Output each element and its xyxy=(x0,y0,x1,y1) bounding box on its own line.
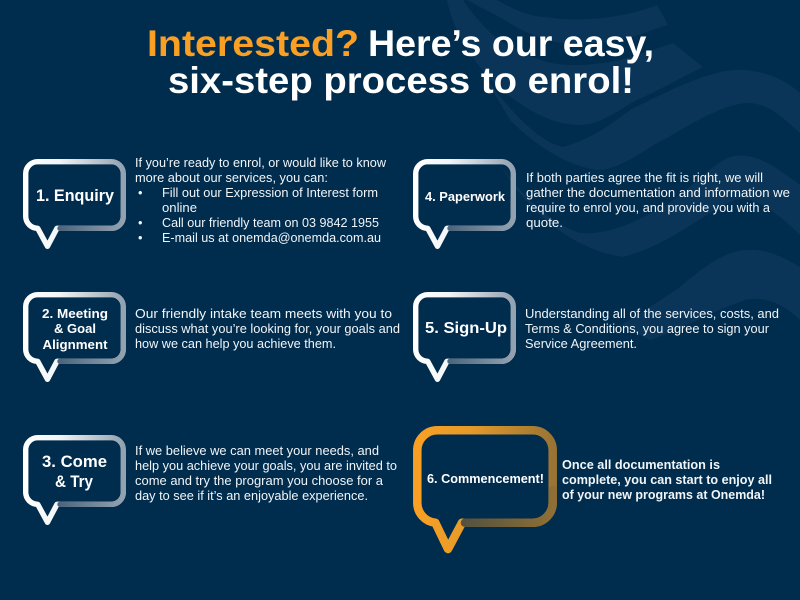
text 2: discuss what you’re looking for, your goals and xyxy=(135,321,400,336)
text 3 xyxy=(135,443,397,503)
title: six-step process to enrol! xyxy=(168,60,634,101)
step 3: come and try xyxy=(26,438,397,522)
label 5: 5. Sign-Up xyxy=(425,320,507,337)
text 1: • xyxy=(138,230,142,245)
text 5: Terms & Conditions, you agree to sign your xyxy=(525,321,770,336)
speech bubble 2 xyxy=(26,295,123,379)
speech bubble 4 xyxy=(416,162,513,246)
step 6: commencement xyxy=(417,430,772,549)
text 2: how we can help you achieve them. xyxy=(135,336,336,351)
text 2 xyxy=(135,306,400,351)
label 2 xyxy=(42,307,108,352)
text 6: complete, you can start to enjoy all xyxy=(562,472,772,487)
step 2: meeting and goal alignment xyxy=(26,295,400,379)
step 4: paperwork xyxy=(416,162,790,246)
text 4: gather the documentation and information we xyxy=(526,185,790,200)
text 4: quote. xyxy=(526,215,563,230)
label 1: 1. Enquiry xyxy=(36,187,115,205)
label 3 xyxy=(42,453,107,491)
title: Here’s our easy, xyxy=(368,23,654,64)
text 5: Understanding all of the services, costs, and xyxy=(525,306,779,321)
text 4: require to enrol you, and provide you with a xyxy=(526,200,771,215)
text 1 xyxy=(135,155,387,245)
text 5: Service Agreement. xyxy=(525,336,637,351)
text 1: If you’re ready to enrol, or would like to know xyxy=(135,155,387,170)
background wave pattern xyxy=(447,0,800,340)
step 1: enquiry xyxy=(26,155,387,246)
label 3: & Try xyxy=(55,473,94,491)
speech bubble 1 xyxy=(26,162,123,246)
label 6: 6. Commencement! xyxy=(427,472,544,486)
text 3: help you achieve your goals, you are invited to xyxy=(135,458,397,473)
text 4: If both parties agree the fit is right, we will xyxy=(526,170,763,185)
text 3: If we believe we can meet your needs, and xyxy=(135,443,379,458)
speech bubble 3 xyxy=(26,438,123,522)
text 3: day to see if it’s an enjoyable experience. xyxy=(135,488,368,503)
text 1: E-mail us at onemda@onemda.com.au xyxy=(162,230,381,245)
label 4: 4. Paperwork xyxy=(425,190,505,204)
text 6: of your new programs at Onemda! xyxy=(562,487,765,502)
text 1: Fill out our Expression of Interest form xyxy=(162,185,378,200)
step 5: sign-up xyxy=(416,295,779,379)
speech bubble 5 xyxy=(416,295,513,379)
speech bubble 6 xyxy=(417,430,553,549)
title: Interested? xyxy=(147,23,359,64)
text 1: more about our services, you can: xyxy=(135,170,328,185)
text 1: Call our friendly team on 03 9842 1955 xyxy=(162,215,379,230)
label 2: Alignment xyxy=(42,338,108,352)
text 3: come and try the program you choose for a xyxy=(135,473,384,488)
label 2: & Goal xyxy=(54,322,96,336)
text 1: • xyxy=(138,215,142,230)
label 3: 3. Come xyxy=(42,453,107,471)
text 6 xyxy=(562,457,772,502)
label 2: 2. Meeting xyxy=(42,307,108,321)
text 6: Once all documentation is xyxy=(562,457,720,472)
text 1: • xyxy=(138,185,142,200)
text 2: Our friendly intake team meets with you to xyxy=(135,306,392,321)
text 4 xyxy=(526,170,790,230)
text 1: online xyxy=(162,200,197,215)
title xyxy=(147,23,654,101)
text 5 xyxy=(525,306,779,351)
